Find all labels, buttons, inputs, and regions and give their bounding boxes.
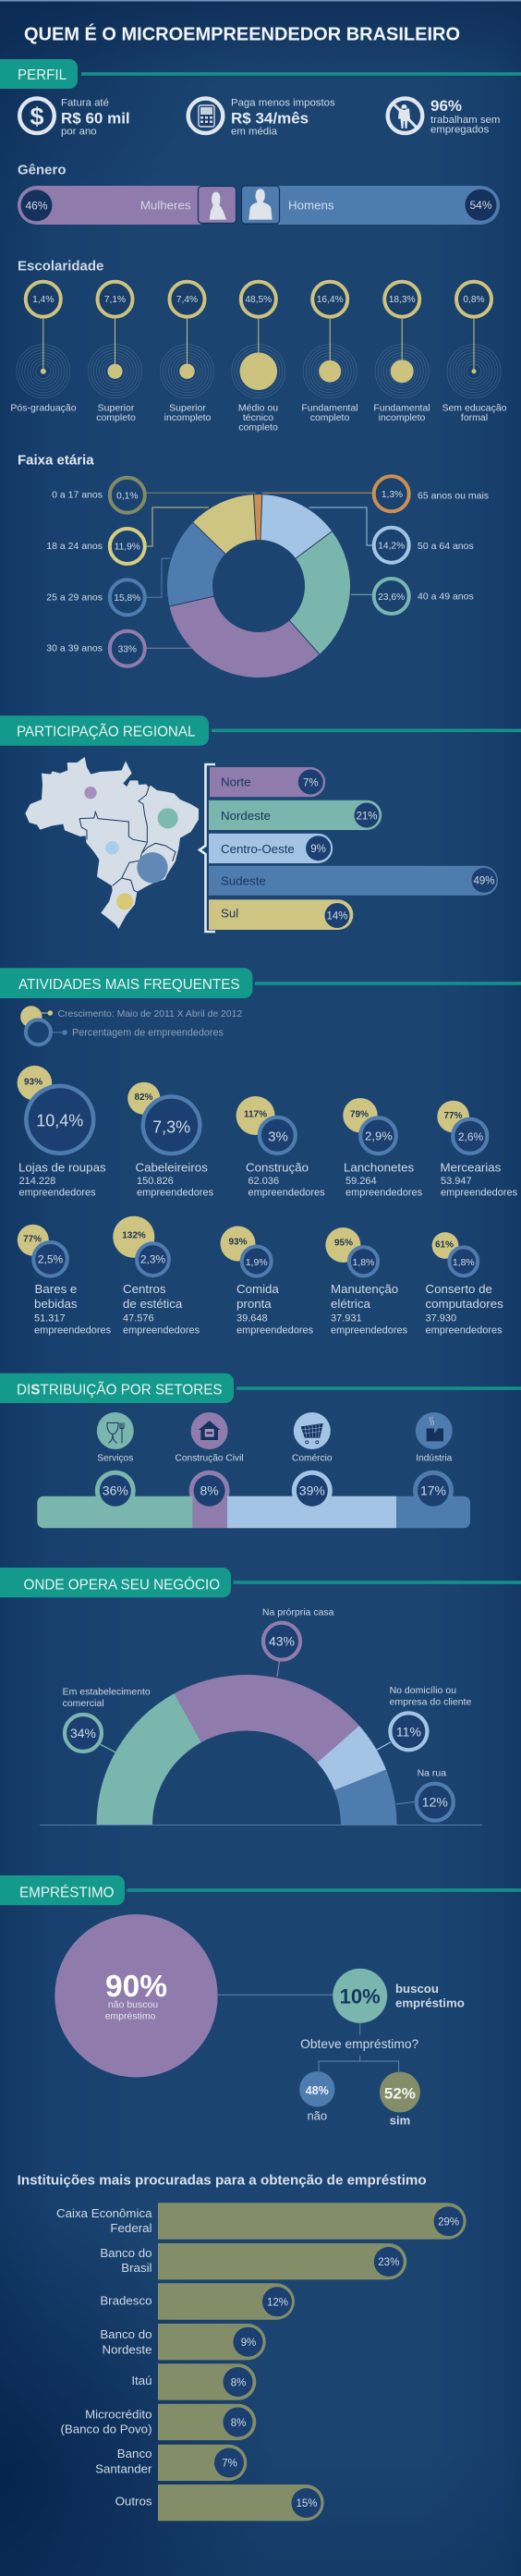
bar: nordeste: Nordeste (221, 809, 271, 823)
chart: instituições (56, 2203, 466, 2521)
item: médio ou técnico completo (232, 282, 285, 433)
bar: santander (95, 2445, 247, 2481)
activity: construção: 117% (244, 1109, 267, 1120)
bar: microcrédito (60, 2404, 256, 2440)
section header: participação regional: PARTICIPAÇÃO REGIONAL (17, 722, 196, 740)
section header: distribuição (0, 1373, 521, 1403)
callout: na própria casa: Na prórpria casa (262, 1606, 334, 1618)
activity: conserto de computadores: Conserto de (425, 1282, 492, 1296)
icon: serviços (97, 1412, 134, 1449)
bar: mulheres: Mulheres (140, 199, 191, 213)
bar: norte: 7% (303, 778, 319, 789)
circle: 48% (299, 2071, 334, 2123)
icon: indústria (416, 1412, 453, 1449)
label: 25 a 29 anos: 15,8% (114, 593, 140, 604)
callout: no domicílio (377, 1685, 471, 1750)
panel: impostos: R$ 34/mês (231, 109, 309, 128)
item: sem educação formal: formal (461, 412, 488, 423)
panel: faturamento (19, 98, 130, 137)
activity: mercearias: 77% (443, 1111, 463, 1121)
item: pós-graduação: Pós-graduação (10, 403, 77, 414)
activity: construção: empreendedores (248, 1188, 325, 1199)
marker: nordeste (158, 808, 178, 828)
circle: 52%: 52% (384, 2084, 416, 2102)
item: médio ou técnico completo: completo (238, 421, 278, 433)
bar: mulheres: 46% (25, 200, 48, 213)
section header: empréstimo (0, 1875, 521, 1905)
bar: sul: Sul (221, 907, 238, 921)
item: sem educação formal: Sem educação (442, 403, 507, 414)
bar: microcrédito: Microcrédito (85, 2407, 151, 2421)
section header: perfil (0, 59, 521, 89)
bar: outros (115, 2484, 324, 2521)
chart: escolaridade (10, 282, 507, 433)
activity: lojas de roupas: 214.228 (18, 1176, 55, 1187)
item: pós-graduação (10, 282, 77, 414)
activity: centros de estética: 2,3% (140, 1253, 166, 1266)
activity: conserto de computadores: computadores (425, 1297, 503, 1311)
bar: sul: 14% (326, 911, 348, 922)
bar: sul (209, 899, 353, 930)
activity: cabeleireiros: Cabeleireiros (135, 1161, 208, 1175)
bar: homens: Homens (288, 199, 334, 213)
ring: serviços (95, 1471, 136, 1511)
bar: bradesco (100, 2283, 295, 2320)
label: 18 a 24 anos: 18 a 24 anos (46, 541, 103, 552)
chart: setores: 8% (200, 1483, 219, 1497)
section header: distribuição: DISTRIBUIÇÃO POR SETORES (17, 1379, 223, 1398)
icon: no employee (388, 98, 422, 133)
panel: impostos: Paga menos impostos (231, 98, 335, 109)
bar: sudeste: Sudeste (221, 873, 266, 887)
bar: sudeste: 49% (473, 876, 495, 887)
chart: setores: 36% (103, 1483, 128, 1497)
callout: no domicílio: No domicílio ou (390, 1685, 456, 1696)
circle: 90% (55, 1914, 218, 2078)
activity: mercearias (437, 1101, 518, 1199)
chart: setores: 17% (420, 1483, 446, 1497)
bar: itaú: 8% (231, 2377, 246, 2388)
callout: em estabelecimento comercial (63, 1687, 151, 1752)
activity: cabeleireiros: 150.826 (137, 1176, 174, 1187)
panel: sem empregados (388, 97, 500, 135)
label: 40 a 49 anos: 23,6% (378, 592, 405, 603)
bar: outros: Outros (115, 2495, 152, 2509)
bar: microcrédito: 8% (231, 2418, 246, 2429)
activity: mercearias: Mercearias (440, 1161, 502, 1175)
label: 65 anos ou mais: 65 anos ou mais (418, 490, 489, 501)
panel: faturamento: R$ 60 mil (61, 109, 130, 128)
item: médio ou técnico completo: Médio ou (238, 403, 278, 414)
panel: sem empregados: 96% (430, 97, 462, 115)
bar: nordeste: 21% (356, 812, 378, 823)
activity: mercearias: 53.947 (441, 1176, 472, 1187)
section header: perfil: PERFIL (18, 67, 67, 83)
label: 30 a 39 anos: 30 a 39 anos (46, 643, 103, 654)
item: superior completo (89, 282, 142, 423)
item: médio ou técnico completo: técnico (243, 412, 273, 423)
item: fundamental completo: Fundamental (301, 403, 358, 414)
activity: construção: 62.036 (248, 1176, 279, 1187)
activity: centros de estética: 132% (122, 1230, 146, 1240)
item: fundamental completo: 16,4% (317, 295, 344, 305)
bar: banco do nordeste: 9% (241, 2338, 256, 2349)
item: fundamental incompleto: Fundamental (373, 403, 430, 414)
marker: sudeste (137, 852, 168, 883)
label: 50 a 64 anos: 50 a 64 anos (418, 541, 474, 552)
panel: impostos (188, 98, 335, 137)
activity: centros de estética: de estética (123, 1297, 183, 1311)
heading: instituições: Instituições mais procuradas para a obtenção de empréstimo (18, 2172, 427, 2188)
label: 0 a 17 anos: 0,1% (116, 492, 138, 501)
label: 30 a 39 anos (46, 631, 145, 666)
item: fundamental completo: completo (310, 412, 349, 423)
circle: 52% (380, 2072, 420, 2127)
bar: norte (210, 767, 325, 797)
heading: gênero: Gênero (18, 163, 67, 177)
activity: cabeleireiros: 7,3% (152, 1117, 190, 1136)
section header: onde opera: ONDE OPERA SEU NEGÓCIO (24, 1575, 220, 1593)
activity: conserto de computadores: 61% (435, 1239, 454, 1250)
bar: santander: 7% (222, 2459, 237, 2470)
chart: onde opera (40, 1606, 482, 1997)
bar: banco do nordeste (100, 2324, 266, 2360)
item: fundamental incompleto: 18,3% (389, 295, 416, 305)
marker: norte (84, 787, 97, 799)
callout: na própria casa (262, 1606, 334, 1677)
map: brasil (25, 757, 199, 929)
bar: norte: Norte (221, 775, 251, 789)
bar: centro-oeste: Centro-Oeste (221, 842, 295, 856)
legend: Percentagem de empreendedores (72, 1028, 224, 1039)
callout: na rua: 12% (422, 1795, 448, 1810)
label: 65 anos ou mais: 1,3% (382, 490, 403, 500)
activity: cabeleireiros: 82% (134, 1093, 153, 1103)
label: 0 a 17 anos (52, 478, 145, 513)
item: sem educação formal: 0,8% (463, 295, 485, 305)
label: 50 a 64 anos (374, 528, 474, 563)
item: fundamental incompleto: incompleto (379, 412, 426, 423)
ring: construção (189, 1471, 230, 1511)
chart: regiões (209, 767, 498, 930)
callout: na própria casa: 43% (269, 1634, 295, 1649)
section header: empréstimo: EMPRÉSTIMO (19, 1883, 115, 1900)
ring: indústria (413, 1471, 454, 1511)
callout: em estabelecimento comercial: 34% (70, 1726, 96, 1740)
circle: 10% (333, 1969, 465, 2023)
activity: lanchonetes: 79% (350, 1109, 369, 1120)
activity: comida pronta: 39.648 (236, 1313, 268, 1325)
question: Obteve empréstimo? (300, 2037, 419, 2051)
bar: bradesco: Bradesco (100, 2293, 151, 2307)
panel: faturamento: Fatura até (61, 98, 109, 109)
bar: santander: Santander (95, 2461, 152, 2475)
callout: no domicílio: 11% (396, 1725, 421, 1740)
activity: comida pronta: empreendedores (236, 1325, 314, 1336)
panel: sem empregados: trabalham sem (430, 115, 500, 126)
label: 18 a 24 anos (46, 529, 145, 564)
chart: setores: 39% (299, 1483, 325, 1497)
half donut (74, 1653, 419, 1997)
circle: 48%: 48% (306, 2084, 329, 2097)
sector labels: Indústria (416, 1454, 453, 1464)
circle: 48%: não (307, 2109, 327, 2123)
bar: banco do brasil: Brasil (121, 2261, 152, 2275)
activity: conserto de computadores (425, 1232, 503, 1336)
item: pós-graduação: 1,4% (32, 295, 54, 305)
activity: manutenção elétrica: 1,8% (353, 1257, 374, 1268)
chart: gênero (18, 186, 500, 225)
callout: no domicílio: empresa do cliente (390, 1696, 471, 1707)
activity: manutenção elétrica (325, 1227, 408, 1336)
activity: comida pronta: 1,9% (246, 1257, 268, 1268)
section header: atividades (0, 968, 521, 998)
bar: banco do brasil (100, 2243, 406, 2279)
item: superior incompleto (161, 282, 214, 423)
icon: calculator (188, 98, 223, 133)
activity: lojas de roupas: empreendedores (18, 1188, 96, 1199)
activity: cabeleireiros (127, 1082, 214, 1199)
donut segments (162, 489, 356, 683)
bar: caixa: Federal (110, 2221, 152, 2235)
activity: centros de estética: empreendedores (123, 1325, 200, 1336)
activity: centros de estética: 47.576 (123, 1313, 154, 1325)
icon: dollar: $ (30, 103, 44, 130)
item: sem educação formal (442, 282, 507, 423)
bar: itaú: Itaú (131, 2374, 151, 2387)
icon: comércio (294, 1412, 331, 1449)
circle: 10%: empréstimo (395, 1996, 465, 2009)
activity: manutenção elétrica: 37.931 (331, 1313, 362, 1325)
label: 0 a 17 anos: 0 a 17 anos (52, 490, 103, 501)
activity: construção (236, 1096, 325, 1199)
bar: caixa: Caixa Econômica (56, 2206, 152, 2220)
legend: Crescimento: Maio de 2011 X Abril de 2012 (57, 1009, 242, 1019)
activity: bares e bebidas: 51.317 (34, 1313, 66, 1325)
bar: centro-oeste: 9% (310, 844, 326, 855)
item: superior incompleto: Superior (169, 403, 206, 414)
heading: faixa etária: Faixa etária (18, 453, 94, 468)
activity: conserto de computadores: 1,8% (453, 1257, 475, 1268)
label: 18 a 24 anos: 11,9% (115, 542, 140, 553)
bar: homens: 54% (469, 199, 492, 212)
activity: lanchonetes: empreendedores (345, 1188, 423, 1199)
bar: homens (242, 186, 500, 225)
item: superior completo: Superior (98, 403, 135, 414)
bracket (200, 764, 215, 932)
circle: 90%: empréstimo (105, 2011, 156, 2022)
connectors (146, 493, 373, 648)
item: superior completo: completo (96, 412, 136, 423)
activity: lojas de roupas: 10,4% (36, 1111, 83, 1129)
bar: santander: Banco (117, 2447, 151, 2460)
activity: manutenção elétrica: 95% (334, 1239, 353, 1249)
activity: centros de estética: Centros (123, 1282, 166, 1296)
item: médio ou técnico completo: 48,5% (245, 295, 272, 305)
callout: em estabelecimento comercial: comercial (63, 1698, 104, 1709)
bar: banco do nordeste: Nordeste (103, 2342, 151, 2356)
activity: bares e bebidas: Bares e (35, 1282, 77, 1296)
sector labels: Comércio (292, 1454, 333, 1464)
activity: mercearias: empreendedores (441, 1188, 518, 1199)
sector labels: Construção Civil (176, 1454, 244, 1464)
activity: bares e bebidas (18, 1225, 112, 1336)
bar: banco do brasil: Banco do (100, 2246, 151, 2260)
bar: centro-oeste (209, 834, 333, 863)
activity: cabeleireiros: empreendedores (137, 1188, 214, 1199)
section header: atividades: ATIVIDADES MAIS FREQUENTES (18, 977, 240, 993)
item: fundamental completo (301, 282, 358, 423)
section header: onde opera (0, 1568, 521, 1597)
marker: sul (116, 893, 133, 910)
bar: banco do brasil: 23% (378, 2257, 399, 2268)
activity: conserto de computadores: 37.930 (425, 1313, 456, 1325)
callout: na rua (396, 1768, 454, 1821)
activity: centros de estética (113, 1216, 200, 1336)
bar: itaú (131, 2363, 256, 2400)
activity: lanchonetes (343, 1098, 423, 1199)
activity: construção: 3% (268, 1129, 288, 1144)
activity: manutenção elétrica: Manutenção (331, 1282, 398, 1296)
activity: lanchonetes: Lanchonetes (344, 1161, 415, 1175)
label: 50 a 64 anos: 14,2% (378, 542, 405, 551)
activity: bares e bebidas: 77% (23, 1234, 42, 1244)
chart: faixa etária donut (46, 476, 489, 683)
activity: mercearias: 2,6% (458, 1130, 484, 1143)
panel: sem empregados: empregados (430, 124, 490, 135)
activity: comida pronta: 93% (228, 1238, 248, 1248)
bar: banco do nordeste: Banco do (100, 2327, 151, 2341)
activity: comida pronta: Comida (236, 1282, 279, 1296)
panel: faturamento: por ano (61, 126, 97, 137)
label: 30 a 39 anos: 33% (118, 645, 137, 654)
label: 25 a 29 anos: 25 a 29 anos (46, 592, 103, 603)
legend (20, 1006, 242, 1044)
section header: participação regional (0, 715, 521, 746)
activity: lanchonetes: 2,9% (365, 1129, 393, 1143)
activity: lojas de roupas: 93% (24, 1077, 42, 1087)
activity: lojas de roupas (18, 1066, 106, 1199)
sector labels: Serviços (97, 1454, 133, 1464)
icon: construção civil (191, 1412, 228, 1449)
callout: em estabelecimento comercial: Em estabelecimento (63, 1687, 151, 1698)
item: superior completo: 7,1% (104, 295, 126, 305)
label: 40 a 49 anos (374, 579, 474, 614)
bar: caixa (56, 2203, 466, 2240)
circle: 10%: 10% (340, 1984, 381, 2008)
callout: na rua: Na rua (418, 1768, 446, 1779)
activity: comida pronta: pronta (236, 1297, 272, 1311)
ring: comércio (292, 1471, 333, 1511)
bar: microcrédito: (Banco do Povo) (60, 2422, 151, 2436)
activity: lojas de roupas: Lojas de roupas (18, 1161, 106, 1175)
activity: comida pronta (220, 1226, 314, 1336)
activity: manutenção elétrica: elétrica (331, 1297, 370, 1311)
circle: 90%: não buscou (108, 1999, 158, 2010)
sector labels (97, 1454, 453, 1464)
activity: bares e bebidas: 2,5% (38, 1253, 64, 1266)
label: 40 a 49 anos: 40 a 49 anos (418, 591, 474, 602)
item: superior incompleto: incompleto (164, 412, 212, 423)
chart: empréstimo (55, 1914, 465, 2127)
title: QUEM É O MICROEMPREENDEDOR BRASILEIRO (24, 24, 460, 44)
chart: setores (37, 1471, 470, 1528)
bar: nordeste (209, 800, 382, 830)
bar: caixa: 29% (438, 2216, 459, 2228)
circle: 52%: sim (390, 2113, 410, 2127)
activity: bares e bebidas: empreendedores (34, 1325, 112, 1336)
panel: impostos: em média (231, 126, 278, 137)
bar: outros: 15% (296, 2498, 318, 2509)
activity: construção: Construção (246, 1161, 309, 1175)
heading: escolaridade: Escolaridade (18, 259, 103, 274)
bar: bradesco: 12% (267, 2297, 288, 2308)
label: 25 a 29 anos (46, 580, 145, 615)
marker: centro-oeste (105, 841, 119, 855)
circle: 90%: 90% (105, 1970, 167, 2004)
activity: conserto de computadores: empreendedores (425, 1325, 503, 1336)
item: fundamental incompleto (373, 282, 430, 423)
bar: sudeste (209, 866, 498, 896)
item: superior incompleto: 7,4% (176, 295, 198, 305)
bar: mulheres (18, 186, 236, 225)
circle: 10%: buscou (395, 1982, 439, 1996)
activity: bares e bebidas: bebidas (34, 1297, 78, 1311)
label: 65 anos ou mais (374, 476, 489, 511)
activity: lanchonetes: 59.264 (345, 1176, 377, 1187)
activity: manutenção elétrica: empreendedores (331, 1325, 408, 1336)
